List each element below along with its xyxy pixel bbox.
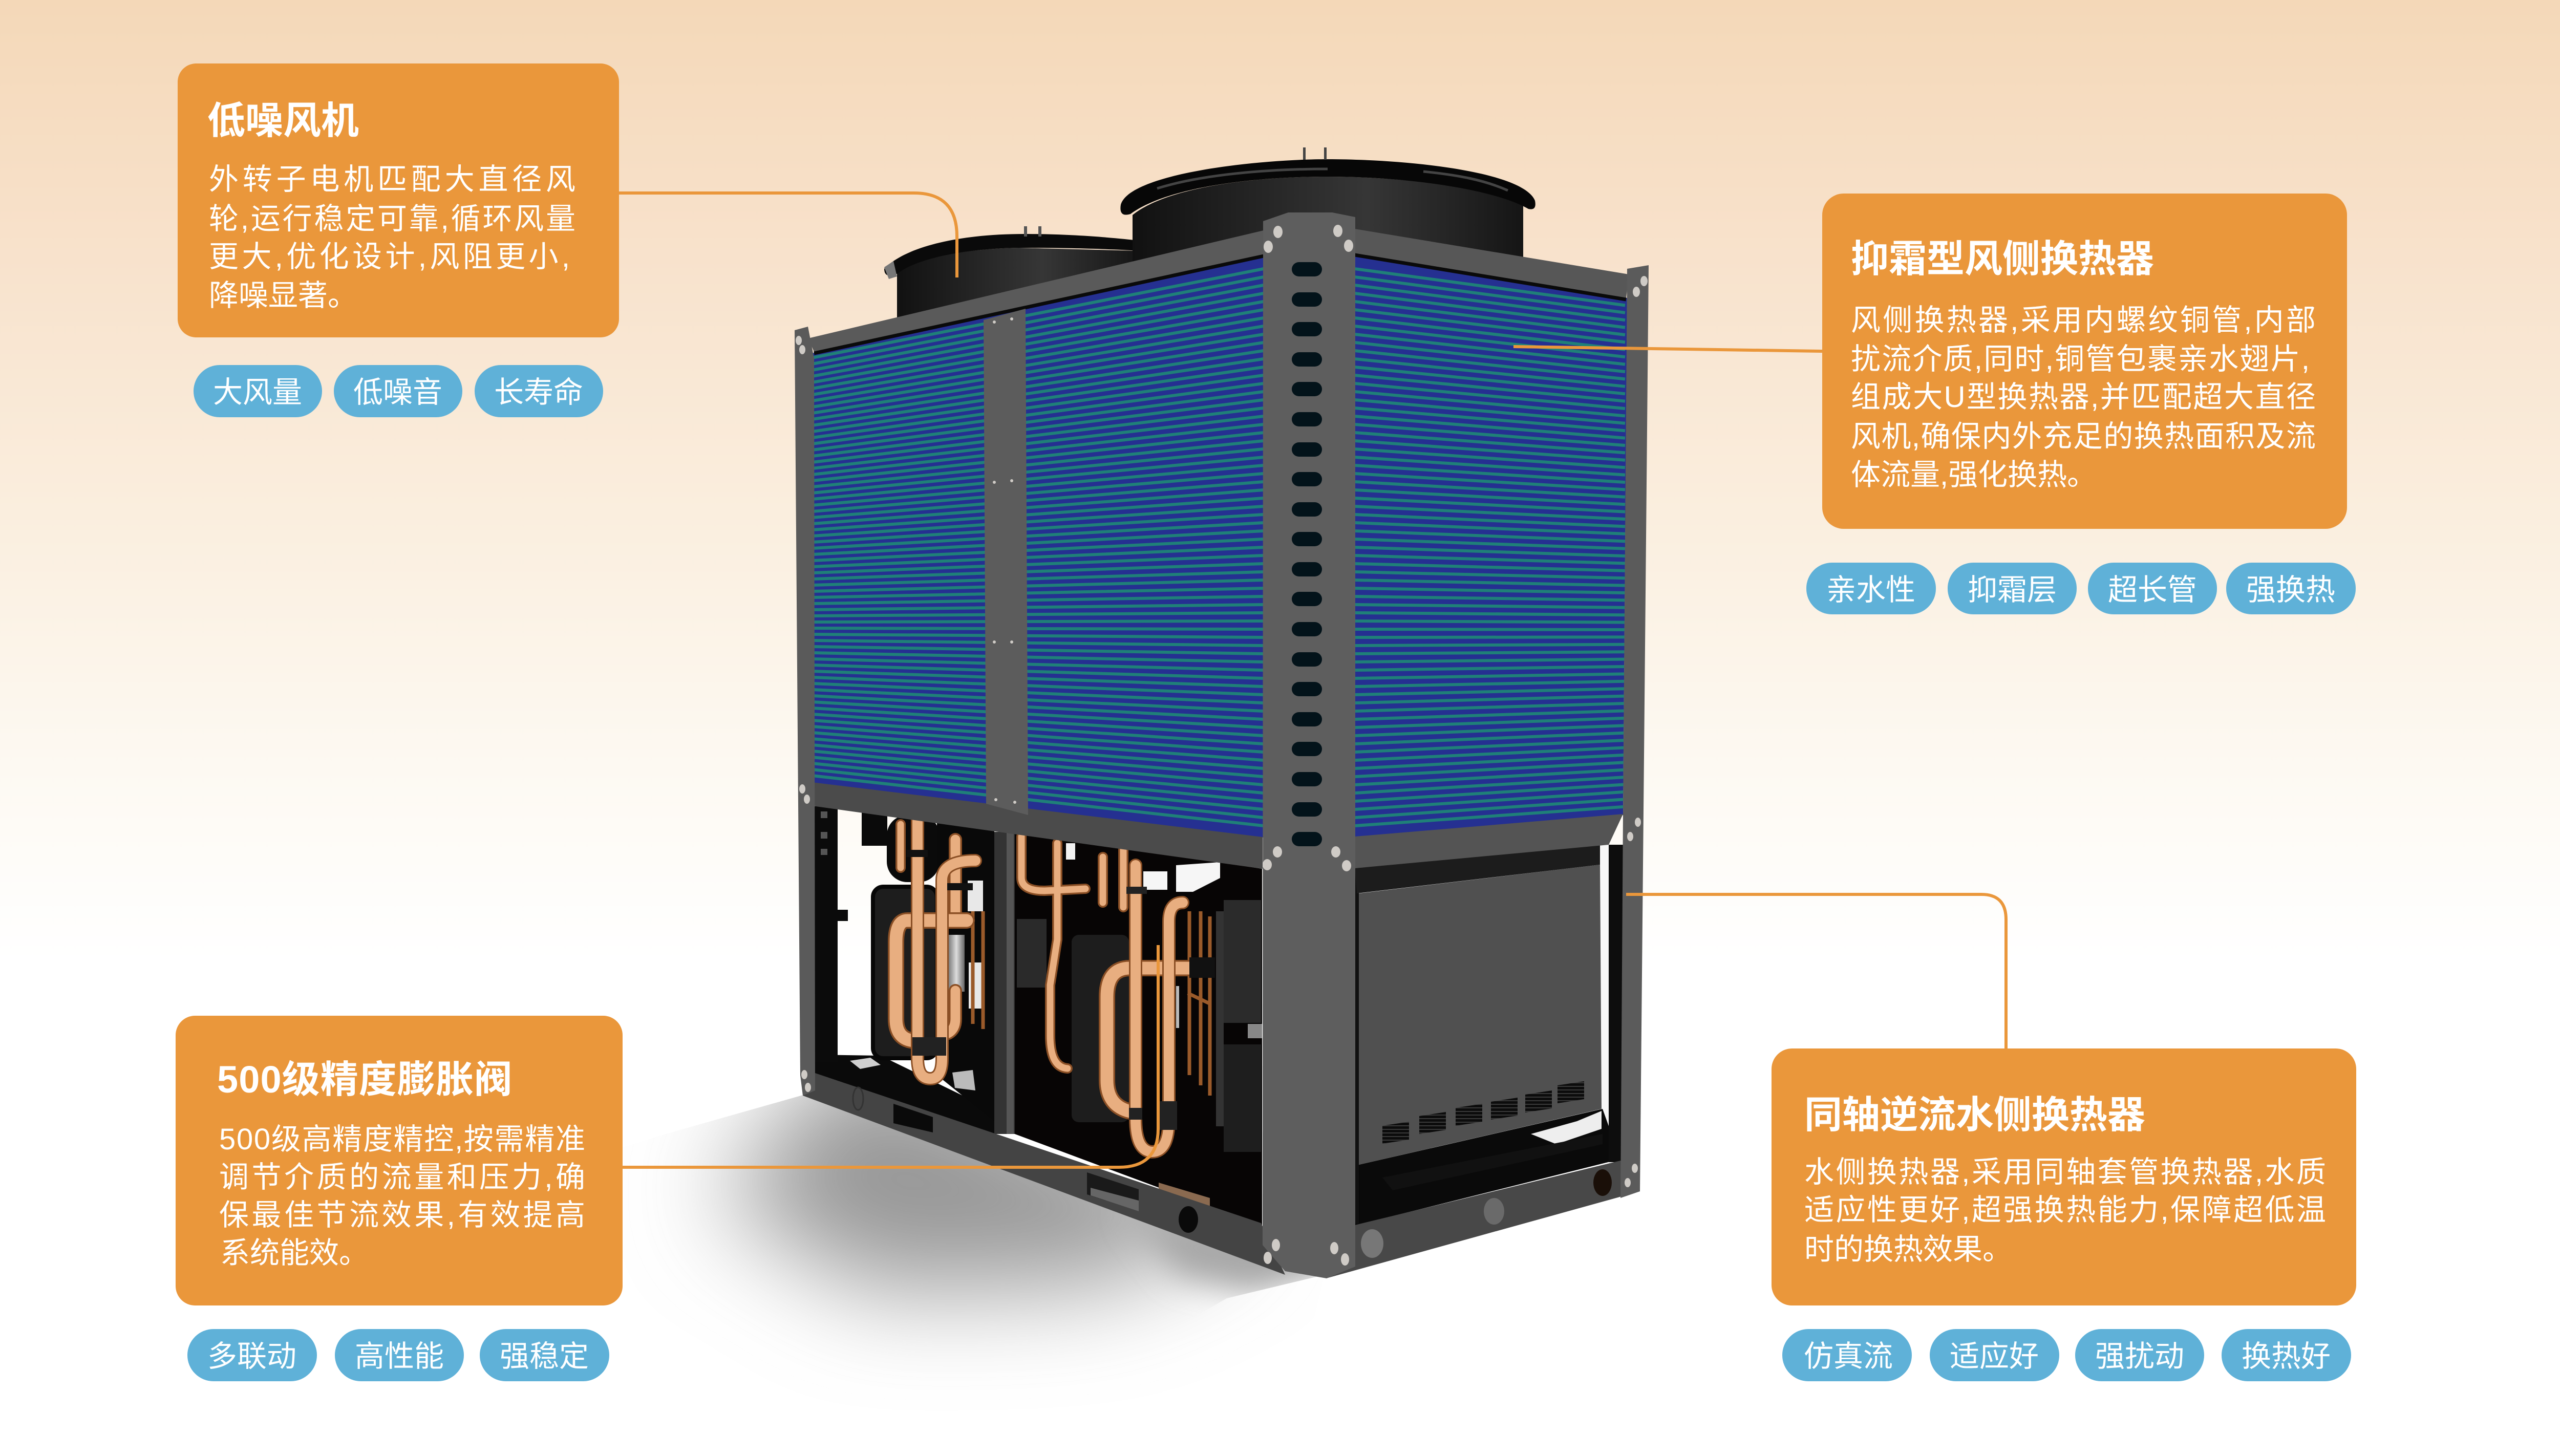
copper tubes xyxy=(896,821,1215,1152)
corner post xyxy=(1263,212,1355,1278)
body text: 体流量,强化换热。 xyxy=(1851,458,2097,491)
connector: expansion valve xyxy=(623,945,1158,1167)
tags: expansion valve xyxy=(187,1329,609,1381)
heading: 500级精度膨胀阀 xyxy=(217,1058,512,1101)
body text: 组成大U型换热器,并匹配超大直径 xyxy=(1851,380,2316,414)
tags: water-side exchanger: 仿真流 xyxy=(1804,1340,1893,1373)
frame: steel rails and posts xyxy=(795,212,1649,1278)
compressor bay: left xyxy=(814,806,994,1142)
tags: water-side exchanger: 强扰动 xyxy=(2095,1340,2184,1373)
body text: 扰流介质,同时,铜管包裹亲水翅片, xyxy=(1851,342,2310,376)
panel: low-noise fan xyxy=(178,63,619,337)
tags: air-side exchanger: 抑霜层 xyxy=(1968,573,2057,607)
left coil: blue fin heat exchanger xyxy=(812,256,1264,838)
body text: 降噪显著。 xyxy=(209,279,357,312)
floor shadow xyxy=(717,1050,1341,1293)
heading: 抑霜型风侧换热器 xyxy=(1851,238,2154,280)
right post xyxy=(1620,265,1649,1198)
connector: air-side exchanger xyxy=(1513,347,1822,351)
panel: coaxial counterflow water-side exchanger xyxy=(1772,1048,2356,1305)
base rails xyxy=(803,1073,1285,1275)
tags: low-noise fan: 大风量 xyxy=(213,376,302,409)
tags: low-noise fan: 长寿命 xyxy=(494,376,583,409)
tags: water-side exchanger: 适应好 xyxy=(1950,1340,2039,1373)
tags: water-side exchanger: 换热好 xyxy=(2242,1340,2331,1373)
body text: 风侧换热器,采用内螺纹铜管,内部 xyxy=(1851,304,2316,337)
body text: 500级高精度精控,按需精准 xyxy=(219,1123,585,1156)
central strut xyxy=(994,832,1015,1134)
body text: 轮,运行稳定可靠,循环风量 xyxy=(209,202,575,235)
right bay opening with control box xyxy=(1355,844,1623,1226)
body text xyxy=(219,1123,585,1270)
body text: 适应性更好,超强换热能力,保障超低温 xyxy=(1804,1193,2326,1227)
body text: 外转子电机匹配大直径风 xyxy=(209,163,575,196)
frame bolts xyxy=(796,225,1648,1266)
body text xyxy=(1804,1155,2326,1266)
back fan: small xyxy=(884,226,1139,328)
tags: air-side exchanger: 强换热 xyxy=(2246,573,2335,607)
tags: water-side exchanger xyxy=(1782,1329,2351,1381)
tags: air-side exchanger xyxy=(1806,563,2356,614)
body text: 调节介质的流量和压力,确 xyxy=(219,1161,585,1194)
heading: 同轴逆流水侧换热器 xyxy=(1804,1094,2145,1136)
body text: 保最佳节流效果,有效提高 xyxy=(219,1198,585,1232)
tags: low-noise fan xyxy=(194,365,603,417)
connector: water-side exchanger xyxy=(1626,894,2006,1048)
tags: expansion valve: 强稳定 xyxy=(500,1340,589,1373)
tags: air-side exchanger: 亲水性 xyxy=(1826,573,1915,607)
top rails xyxy=(808,230,1264,352)
control box vents xyxy=(1382,1081,1584,1144)
corner post slots xyxy=(1292,262,1322,846)
body text: 风机,确保内外充足的换热面积及流 xyxy=(1851,420,2316,453)
body text: 系统能效。 xyxy=(220,1236,369,1270)
body text: 时的换热效果。 xyxy=(1804,1233,2012,1266)
product: heat pump unit xyxy=(795,147,1649,1278)
tags: low-noise fan: 低噪音 xyxy=(353,376,442,409)
tags: air-side exchanger: 超长管 xyxy=(2108,573,2197,607)
body text: 更大,优化设计,风阻更小, xyxy=(209,240,570,273)
tags: expansion valve: 多联动 xyxy=(207,1340,296,1373)
left post xyxy=(795,327,815,1096)
body text: 水侧换热器,采用同轴套管换热器,水质 xyxy=(1804,1155,2326,1189)
middle rails xyxy=(812,782,1263,869)
front fan: large xyxy=(1120,147,1535,271)
tags: expansion valve: 高性能 xyxy=(355,1340,444,1373)
compressor bay: right xyxy=(1015,829,1262,1226)
connector: fan xyxy=(619,193,957,277)
heading: 低噪风机 xyxy=(207,99,359,142)
right coil: blue fin heat exchanger xyxy=(1355,254,1627,838)
middle strut xyxy=(984,309,1028,815)
panel: frost-suppressing air-side exchanger xyxy=(1822,194,2347,529)
panel: 500-step expansion valve xyxy=(176,1016,623,1305)
body text xyxy=(1851,304,2316,491)
body text xyxy=(209,163,575,312)
